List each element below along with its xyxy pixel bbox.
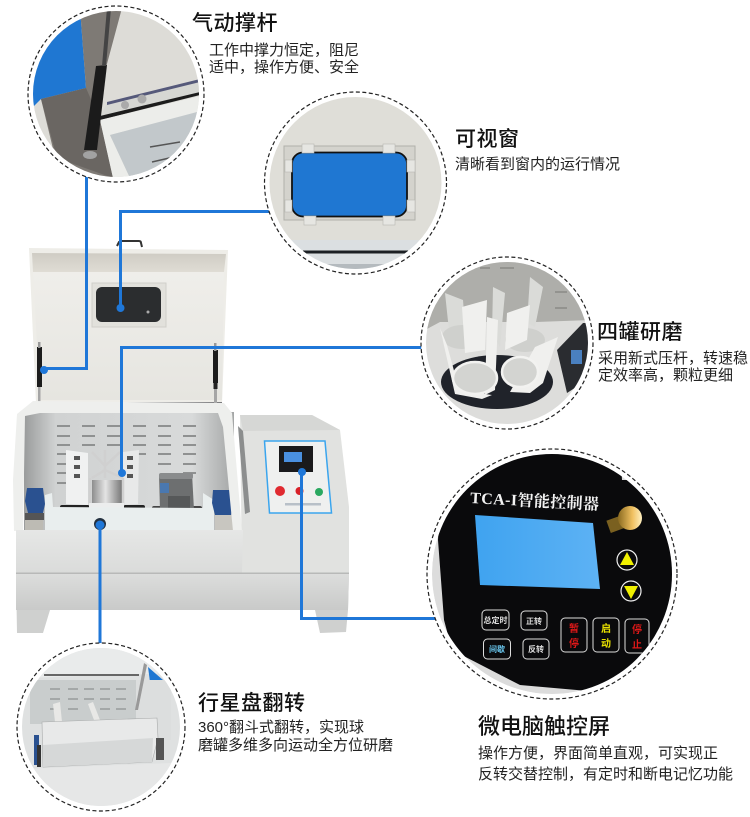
- connector: window: [116, 212, 274, 312]
- keypad: [482, 610, 649, 659]
- machine base and legs: [16, 574, 349, 633]
- text block: gas strut: 气动撑杆: [192, 12, 278, 35]
- text block: touch screen: [478, 714, 733, 783]
- connector: control screen: [298, 468, 437, 618]
- callout circle: planetary flip: [17, 643, 185, 811]
- gold knob: [606, 506, 642, 533]
- arrow buttons: [617, 550, 641, 601]
- text block: touch screen: 操作方便，界面简单直观，可实现正: [478, 745, 718, 762]
- control panel: [264, 441, 332, 513]
- lid window: [92, 283, 166, 327]
- connector lines: [40, 175, 437, 645]
- keypad labels: 启: [601, 622, 611, 635]
- text block: planetary flip: 360°翻斗式翻转，实现球: [198, 719, 364, 736]
- keypad labels: 正转: [526, 616, 542, 626]
- open lid: [29, 248, 228, 406]
- keypad labels: [484, 615, 642, 654]
- text block: four-jar grinding: 采用新式压杆，转速稳: [598, 350, 748, 367]
- text block: gas strut: [192, 12, 359, 76]
- machine: planetary ball mill: [13, 241, 349, 633]
- text block: touch screen: 反转交替控制，有定时和断电记忆功能: [478, 765, 733, 783]
- main cabinet: [13, 401, 349, 574]
- connector: gas strut: [40, 175, 86, 374]
- callout circle: four jars: [421, 257, 593, 430]
- text block: planetary flip: [198, 692, 393, 754]
- text block: planetary flip: 行星盘翻转: [198, 692, 306, 715]
- text block: four-jar grinding: 四罐研磨: [597, 321, 683, 344]
- text block: gas strut: 适中，操作方便、安全: [209, 58, 359, 76]
- drum: [45, 493, 214, 531]
- blue screen: [475, 515, 600, 589]
- lid handle: [117, 241, 142, 247]
- callout circle: viewing window: [264, 92, 446, 280]
- connector: planetary flip: [96, 520, 104, 645]
- callout circle: gas strut: [28, 6, 205, 182]
- text block: four-jar grinding: 定效率高，颗粒更细: [598, 367, 733, 384]
- right control cabinet: [238, 415, 349, 573]
- mill chamber: [24, 412, 235, 532]
- keypad labels: 停: [569, 637, 579, 650]
- text block: gas strut: 工作中撑力恒定，阻尼: [209, 42, 359, 59]
- text block: viewing window: 可视窗: [455, 128, 520, 151]
- gas struts: [37, 342, 218, 423]
- keypad labels: 暂: [569, 622, 579, 635]
- keypad labels: 总定时: [484, 615, 508, 625]
- flip knob: [94, 518, 106, 530]
- keypad labels: 止: [632, 638, 642, 651]
- text block: four-jar grinding: [597, 321, 748, 384]
- callout circle: touch controller: [427, 440, 690, 700]
- text block: planetary flip: 磨罐多维多向运动全方位研磨: [198, 736, 393, 754]
- keypad labels: 间歇: [489, 644, 505, 654]
- text block: viewing window: 清晰看到窗内的运行情况: [455, 155, 620, 173]
- controller title: TCA-I智能控制器: [470, 488, 600, 514]
- perforated back plate: [57, 425, 196, 484]
- blue gearboxes: [25, 488, 233, 515]
- text block: viewing window: [455, 128, 620, 173]
- grinding jars: [60, 450, 202, 510]
- connector: four jars: [118, 348, 424, 477]
- keypad labels: 动: [601, 638, 611, 650]
- text block: touch screen: 微电脑触控屏: [478, 714, 610, 739]
- keypad labels: 反转: [528, 644, 544, 654]
- keypad labels: 停: [632, 623, 642, 636]
